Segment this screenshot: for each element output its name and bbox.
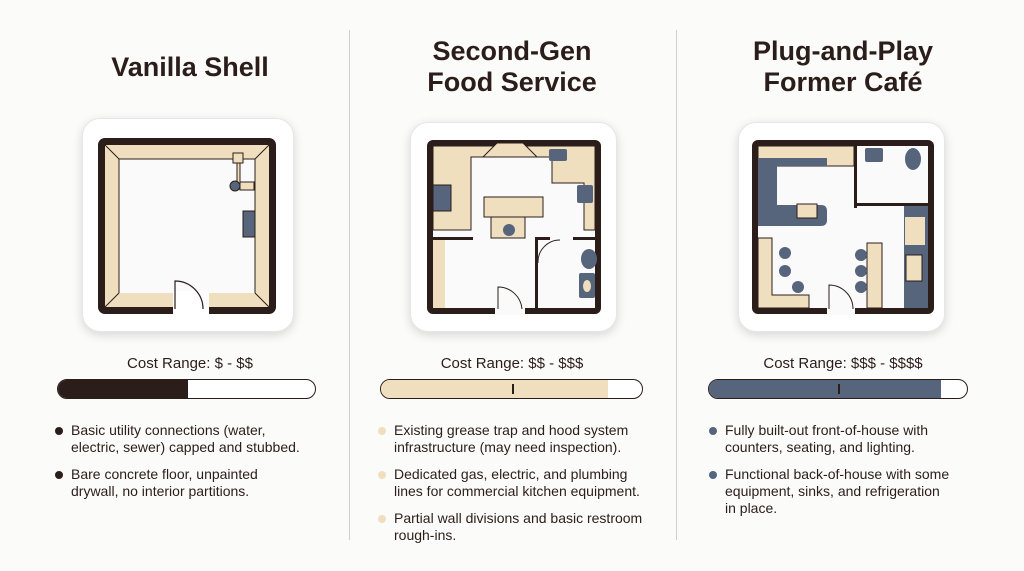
bullets: plug-and-play: [709, 422, 949, 516]
bullets: second-gen: [378, 422, 642, 543]
bar: second-gen: [380, 379, 643, 399]
bullets: vanilla: Bare concrete floor, unpainted drywall, no interior partitions.: [71, 466, 258, 499]
bar: plug-and-play: [708, 379, 968, 399]
cost range: second-gen: Cost Range: $$ - $$$: [441, 355, 583, 372]
cost range: plug-and-play: Cost Range: $$$ - $$$$: [763, 355, 923, 372]
title: Second-Gen Food Service: [427, 36, 597, 97]
bullets: vanilla: Basic utility connections (water, electric, sewer) capped and stubbed.: [71, 422, 300, 455]
title: Plug-and-Play Former Café: [753, 36, 933, 97]
card: second-gen floor plan: [410, 122, 617, 332]
title: Plug-and-Play Former Café: Plug-and-Play: [753, 36, 933, 66]
title: Second-Gen Food Service: Food Service: [427, 67, 597, 97]
bullets: plug-and-play: Fully built-out front-of-house with counters, seating, and lighting.: [725, 422, 928, 455]
card: vanilla shell floor plan: [82, 118, 294, 332]
bar: vanilla: [57, 379, 316, 399]
bullets: second-gen: Dedicated gas, electric, and plumbing lines for commercial kitchen equipment.: [394, 466, 640, 499]
card: plug-and-play floor plan: [738, 122, 945, 332]
bullets: plug-and-play: Functional back-of-house with some equipment, sinks, and refrigeration in place.: [725, 466, 949, 516]
title: Second-Gen Food Service: Second-Gen: [432, 36, 592, 66]
bullets: second-gen: Partial wall divisions and basic restroom rough-ins.: [394, 510, 642, 543]
cost range: vanilla: Cost Range: $ - $$: [127, 355, 253, 372]
bullets: vanilla: [55, 422, 300, 499]
title: Plug-and-Play Former Café: Former Café: [763, 67, 923, 97]
title: Vanilla Shell: Vanilla Shell: [111, 52, 269, 82]
bullets: second-gen: Existing grease trap and hood system infrastructure (may need inspection).: [394, 422, 628, 455]
